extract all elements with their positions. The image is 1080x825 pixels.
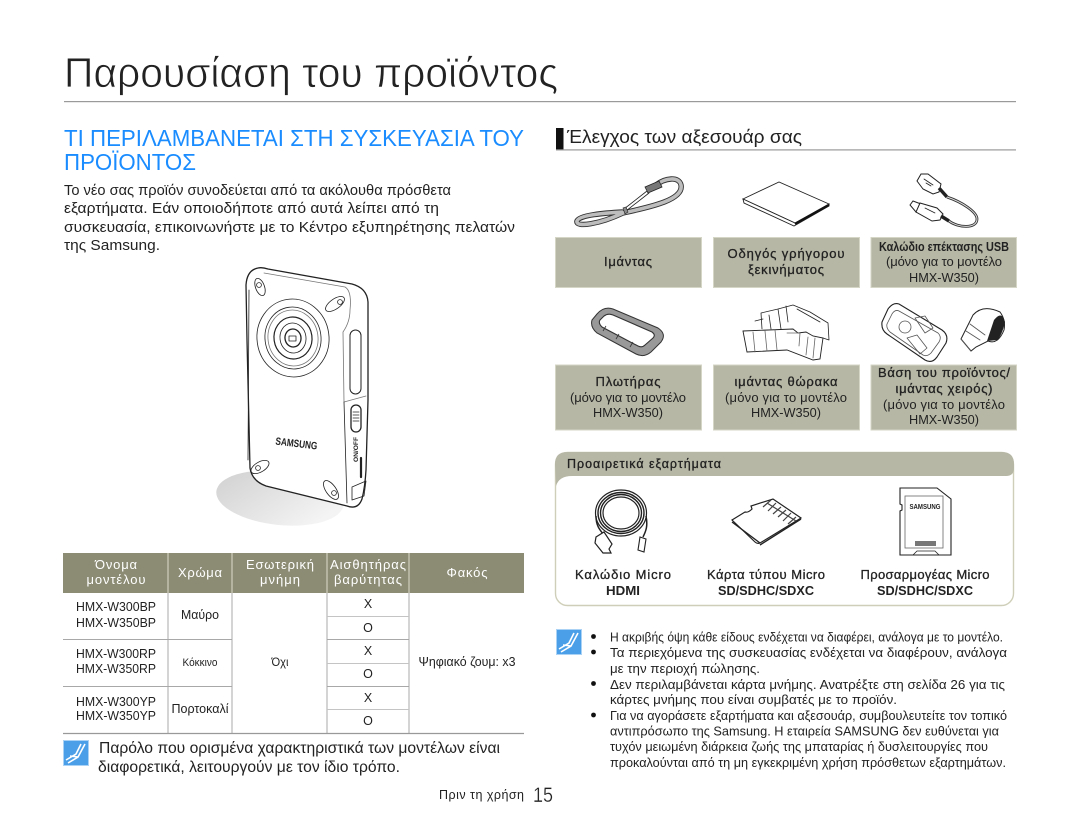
side label: ON/OFF <box>353 437 360 462</box>
icon: strap <box>577 179 681 224</box>
table header: βαρύτητας <box>334 572 402 587</box>
note bullet list: κάρτες μνήμης που είναι συμβατές με το προϊόν. <box>610 693 897 707</box>
label: micro HDMI cable: HDMI <box>606 583 640 598</box>
icon: floater frame <box>592 308 663 356</box>
info box: floater: Πλωτήρας <box>596 374 660 389</box>
title: Παρουσίαση του προϊόντος <box>64 49 558 96</box>
table header: μοντέλου <box>86 572 146 587</box>
table rows: HMX-W300BP <box>76 600 156 614</box>
table rows: Κόκκινο <box>182 657 218 669</box>
icon: mount <box>882 304 947 361</box>
page footer: Πριν τη χρήση <box>439 788 524 802</box>
table rows <box>76 597 516 728</box>
table header: Όνομα <box>94 557 137 572</box>
page footer <box>439 784 553 807</box>
icon: micro SD adapter: SAMSUNG <box>910 502 941 511</box>
note bullet list: προκαλούνται από τη μη εγκεκριμένη χρήση πρόσθετων εξαρτημάτων. <box>610 756 1006 770</box>
table rows: Πορτοκαλί <box>172 702 229 716</box>
side slot <box>350 330 361 394</box>
brand name: SAMSUNG <box>275 436 318 453</box>
info box: chest harness: (μόνο για το μοντέλο <box>725 390 847 405</box>
table header: Χρώμα <box>178 565 222 580</box>
label: micro SD card <box>707 567 825 598</box>
table rows: Όχι <box>271 655 289 669</box>
info box: chest harness <box>714 365 860 430</box>
section heading: package contents: ΠΡΟΪΟΝΤΟΣ <box>64 149 196 175</box>
note bullet list: με την περιοχή πώλησης. <box>610 662 760 676</box>
table rows: HMX-W350RP <box>76 662 156 676</box>
info box: USB extension cable: (μόνο για το μοντέλο <box>886 254 1002 269</box>
shadow <box>214 464 346 532</box>
panel heading: Προαιρετικά εξαρτήματα <box>567 457 721 471</box>
table rows: X <box>364 597 373 611</box>
label: micro SD adapter <box>860 567 990 598</box>
corner screws <box>249 277 347 502</box>
label: micro SD adapter: Προσαρμογέας Micro <box>860 567 990 582</box>
icon: note (left) <box>64 740 88 766</box>
table header <box>63 553 524 593</box>
note text (left): Παρόλο που ορισμένα χαρακτηριστικά των μοντέλων είναι <box>99 740 500 757</box>
panel: optional accessories <box>555 452 1014 606</box>
icon: micro HDMI cable <box>595 490 647 553</box>
camera illustration <box>214 268 368 532</box>
note bullet list: Δεν περιλαμβάνεται κάρτα μνήμης. Ανατρέξτε στη σελίδα 26 για τις <box>610 678 1005 692</box>
icon: micro SD adapter <box>900 488 951 555</box>
info box: USB extension cable: Καλώδιο επέκτασης USB <box>879 239 1009 254</box>
info box: quick start guide: Οδηγός γρήγορου <box>728 246 844 261</box>
icon: quick start guide <box>743 182 829 226</box>
table rows: HMX-W300YP <box>76 695 156 709</box>
label: micro SD card: SD/SDHC/SDXC <box>718 583 815 598</box>
note bullet list: αντιπρόσωπο της Samsung. Η εταιρεία SAMSUNG δεν ευθύνεται για <box>610 724 999 738</box>
intro text block: της Samsung. <box>64 237 160 254</box>
label: micro HDMI cable <box>575 567 671 598</box>
info box: chest harness: ιμάντας θώρακα <box>734 374 838 389</box>
icon: micro SD card <box>732 499 801 545</box>
info box: strap: Ιμάντας <box>604 254 652 269</box>
table rows: Μαύρο <box>181 608 219 622</box>
section heading: package contents: ΤΙ ΠΕΡΙΛΑΜΒΑΝΕΤΑΙ ΣΤΗ ΣΥΣΚΕΥΑΣΙΑ ΤΟΥ <box>64 125 524 151</box>
table rows: X <box>364 644 373 658</box>
info box: USB extension cable <box>871 238 1016 288</box>
icon: note (right) <box>556 630 582 654</box>
note bullet list: τυχόν μειωμένη διάρκεια ζωής της μπαταρίας ή δυσλειτουργίες που <box>610 740 988 754</box>
info box: quick start guide: ξεκινήματος <box>748 262 824 277</box>
note bullet list: Τα περιεχόμενα της συσκευασίας ενδέχεται να διαφέρουν, ανάλογα <box>610 646 1007 660</box>
note bullet list: Για να αγοράσετε εξαρτήματα και αξεσουάρ, συμβουλευτείτε τον τοπικό <box>610 709 1007 723</box>
page footer: 15 <box>533 784 553 807</box>
lens <box>252 294 334 382</box>
intro text block <box>64 182 515 254</box>
info box: strap <box>556 238 702 288</box>
note text (left): διαφορετικά, λειτουργούν με τον ίδιο τρόπο. <box>98 759 400 776</box>
model table <box>63 553 524 734</box>
info box: chest harness: HMX-W350) <box>751 405 821 420</box>
intro text block: εξαρτήματα. Εάν οποιοδήποτε από αυτά λείπει από τη <box>64 200 439 217</box>
info box: mount and hand strap: Βάση του προϊόντος/ <box>878 365 1010 380</box>
label: micro SD card: Κάρτα τύπου Micro <box>707 567 825 582</box>
intro text block: Το νέο σας προϊόν συνοδεύεται από τα ακόλουθα πρόσθετα <box>64 182 451 199</box>
table rows: O <box>363 667 373 681</box>
table rows: O <box>363 621 373 635</box>
label: micro HDMI cable: Καλώδιο Micro <box>575 567 671 582</box>
subheading: accessories check <box>556 127 1016 150</box>
table rows: Ψηφιακό ζουμ: x3 <box>418 655 516 669</box>
info box: mount and hand strap: HMX-W350) <box>909 412 979 427</box>
info box: mount and hand strap: (μόνο για το μοντέλο <box>883 397 1005 412</box>
side switch <box>351 405 361 432</box>
table rows: HMX-W300RP <box>76 647 156 661</box>
info box: mount and hand strap: ιμάντας χειρός) <box>896 381 992 396</box>
info box: quick start guide <box>714 238 860 288</box>
table rows: HMX-W350BP <box>76 616 156 630</box>
label: micro SD adapter: SD/SDHC/SDXC <box>877 583 974 598</box>
intro text block: συσκευασία, επικοινωνήστε με το Κέντρο εξυπηρέτησης πελατών <box>64 219 515 236</box>
table header: μνήμη <box>260 572 300 587</box>
icon: chest harness <box>743 305 829 360</box>
note text (left) <box>98 740 500 776</box>
icon: USB extension cable <box>910 174 977 226</box>
table rows: O <box>363 714 373 728</box>
info box: floater: HMX-W350) <box>593 405 663 420</box>
table header: Φακός <box>446 565 488 580</box>
info box: USB extension cable: HMX-W350) <box>909 270 979 285</box>
note bullet list <box>591 630 1007 770</box>
table header: Αισθητήρας <box>330 557 406 572</box>
info box: floater: (μόνο για το μοντέλο <box>570 390 686 405</box>
table rows: HMX-W350YP <box>76 709 156 723</box>
info box: floater <box>556 365 702 430</box>
section heading: package contents <box>64 125 524 175</box>
note bullet list: Η ακριβής όψη κάθε είδους ενδέχεται να διαφέρει, ανάλογα με το μοντέλο. <box>610 630 1003 644</box>
icon: hand strap <box>961 309 1005 351</box>
subheading: accessories check: Έλεγχος των αξεσουάρ σας <box>566 127 802 147</box>
table rows: X <box>364 691 373 705</box>
info box: mount and hand strap <box>871 365 1016 430</box>
table header: Εσωτερική <box>246 557 314 572</box>
